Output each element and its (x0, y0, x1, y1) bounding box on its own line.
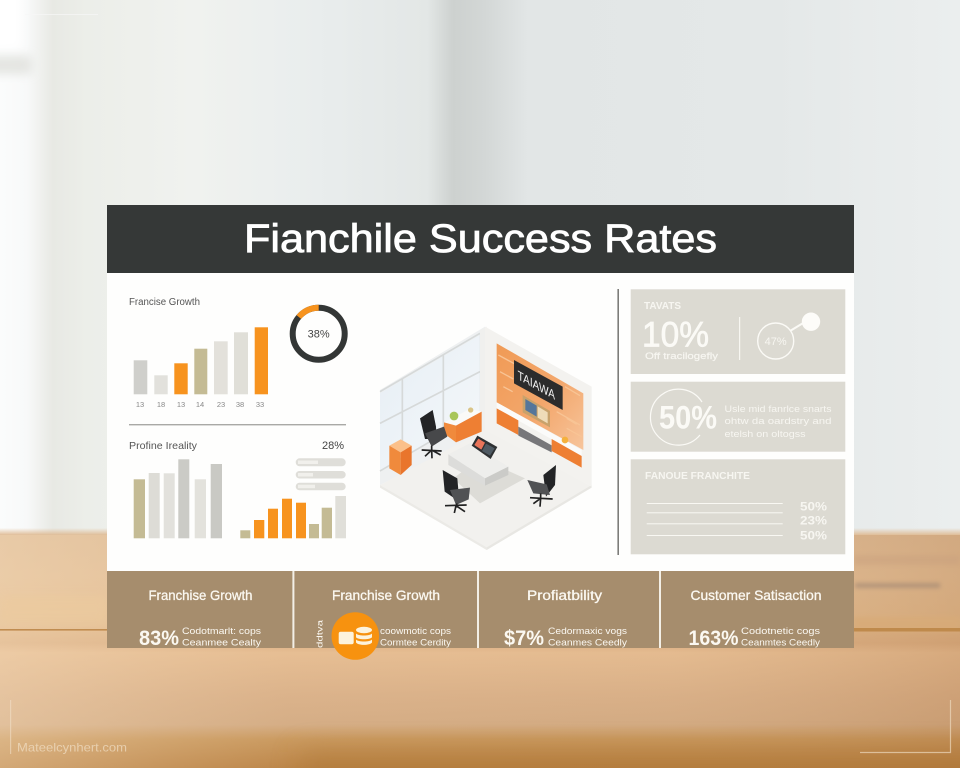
orange block (389, 439, 412, 475)
desk (448, 443, 508, 486)
left cabinet (444, 407, 482, 442)
metric: franchise growth 2: ddtva (316, 619, 324, 648)
metric: franchise growth: Franchise Growth (148, 587, 252, 603)
separator (739, 317, 740, 360)
metric: profitability: Profiatbility (527, 588, 602, 603)
title banner (107, 205, 854, 273)
list values (800, 500, 827, 542)
metric: franchise growth 2: Franchise Growth (332, 587, 440, 603)
metric: franchise growth 2: Cormtee Cerdity (380, 638, 451, 648)
orange brick wall (497, 343, 583, 450)
background: blurred office wall (0, 0, 960, 545)
description: etelsh on oltogss (724, 429, 806, 440)
vertical divider (617, 289, 619, 555)
percent value: 28% (322, 440, 344, 452)
description: ohtw da oardstry and (724, 416, 832, 427)
office chair: right (527, 465, 556, 507)
list lines (647, 503, 783, 536)
list values: 23% (800, 514, 827, 528)
metric: profitability: Ceanmes Ceedly (548, 638, 627, 648)
axis labels: 14 (196, 400, 204, 409)
right wall (485, 327, 592, 487)
panel heading: FANOUE FRANCHITE (645, 471, 750, 482)
office chair: front (443, 470, 470, 513)
metric: profitability: $7% (504, 627, 544, 650)
watermark text: Mateelcynhert.com (17, 740, 127, 754)
title: Fianchile Success Rates (244, 217, 717, 261)
panel: white infographic card (107, 273, 854, 571)
donut chart: 38% (308, 328, 330, 340)
big number: 50% (659, 399, 717, 435)
panel label: TAVATS (644, 301, 681, 312)
metric: profitability (504, 588, 627, 650)
axis labels: 13 (177, 400, 185, 409)
heading: Profine Ireality (129, 440, 198, 452)
axis labels (136, 400, 264, 409)
metric: customer satisfaction: Customer Satisaction (690, 587, 822, 603)
divider (129, 424, 346, 425)
axis labels: 13 (136, 400, 144, 409)
panel: stat 50% (631, 382, 845, 452)
axis labels: 18 (157, 400, 165, 409)
axis labels: 38 (236, 400, 244, 409)
heading: Francise Growth (129, 297, 200, 308)
list values: 50% (800, 528, 827, 542)
description: Usle mid fanrlce snarts (724, 404, 832, 415)
left wall with windows (380, 327, 487, 485)
metric: franchise growth (139, 587, 261, 650)
list values: 50% (800, 500, 827, 514)
metric: franchise growth: Ceanmee Cealty (182, 638, 261, 648)
office chair: left (420, 410, 447, 458)
icon: orange database badge (332, 612, 379, 660)
black sign: TAIAWA (518, 368, 556, 403)
background: wooden table (0, 528, 960, 768)
donut chart (293, 308, 345, 360)
frame corner left (10, 700, 11, 754)
metric: franchise growth: 83% (139, 627, 179, 650)
metric: franchise growth 2 (316, 587, 451, 648)
metric: profitability: Cedormaxic vogs (548, 626, 627, 637)
panel: franchise growth chart (129, 297, 345, 409)
panel: profitability charts (129, 440, 346, 538)
description (724, 404, 832, 440)
wall screen (523, 395, 550, 427)
legend pills (296, 458, 346, 490)
rug (453, 458, 525, 503)
illustration: isometric office room (380, 327, 592, 550)
metric: customer satisfaction: Ceanmtes Ceedly (741, 638, 820, 648)
panel: franchise list (631, 459, 845, 554)
caption: Off tracilogefly (645, 351, 718, 362)
big number: 10% (642, 316, 709, 355)
metric: customer satisfaction: Codotnetic cogs (741, 626, 820, 637)
frame corner right (860, 700, 950, 752)
metric: franchise growth 2: coowmotic cops (380, 626, 451, 637)
metric: franchise growth: Codotmarlt: cops (182, 626, 261, 637)
panel: stat 10% (631, 289, 845, 374)
desk monitor (472, 436, 497, 459)
node gauge icon (758, 312, 820, 359)
bar chart (134, 327, 268, 394)
band: bottom metrics (107, 571, 854, 650)
bar chart: neutral (134, 459, 222, 538)
bar chart: orange (240, 496, 346, 538)
axis labels: 23 (217, 400, 225, 409)
floor (380, 428, 592, 550)
ring (650, 389, 702, 445)
metric: customer satisfaction (688, 587, 822, 650)
node gauge icon: 47% (765, 336, 787, 348)
shelf and cabinets (497, 402, 582, 468)
axis labels: 33 (256, 400, 264, 409)
metric: customer satisfaction: 163% (688, 627, 739, 650)
